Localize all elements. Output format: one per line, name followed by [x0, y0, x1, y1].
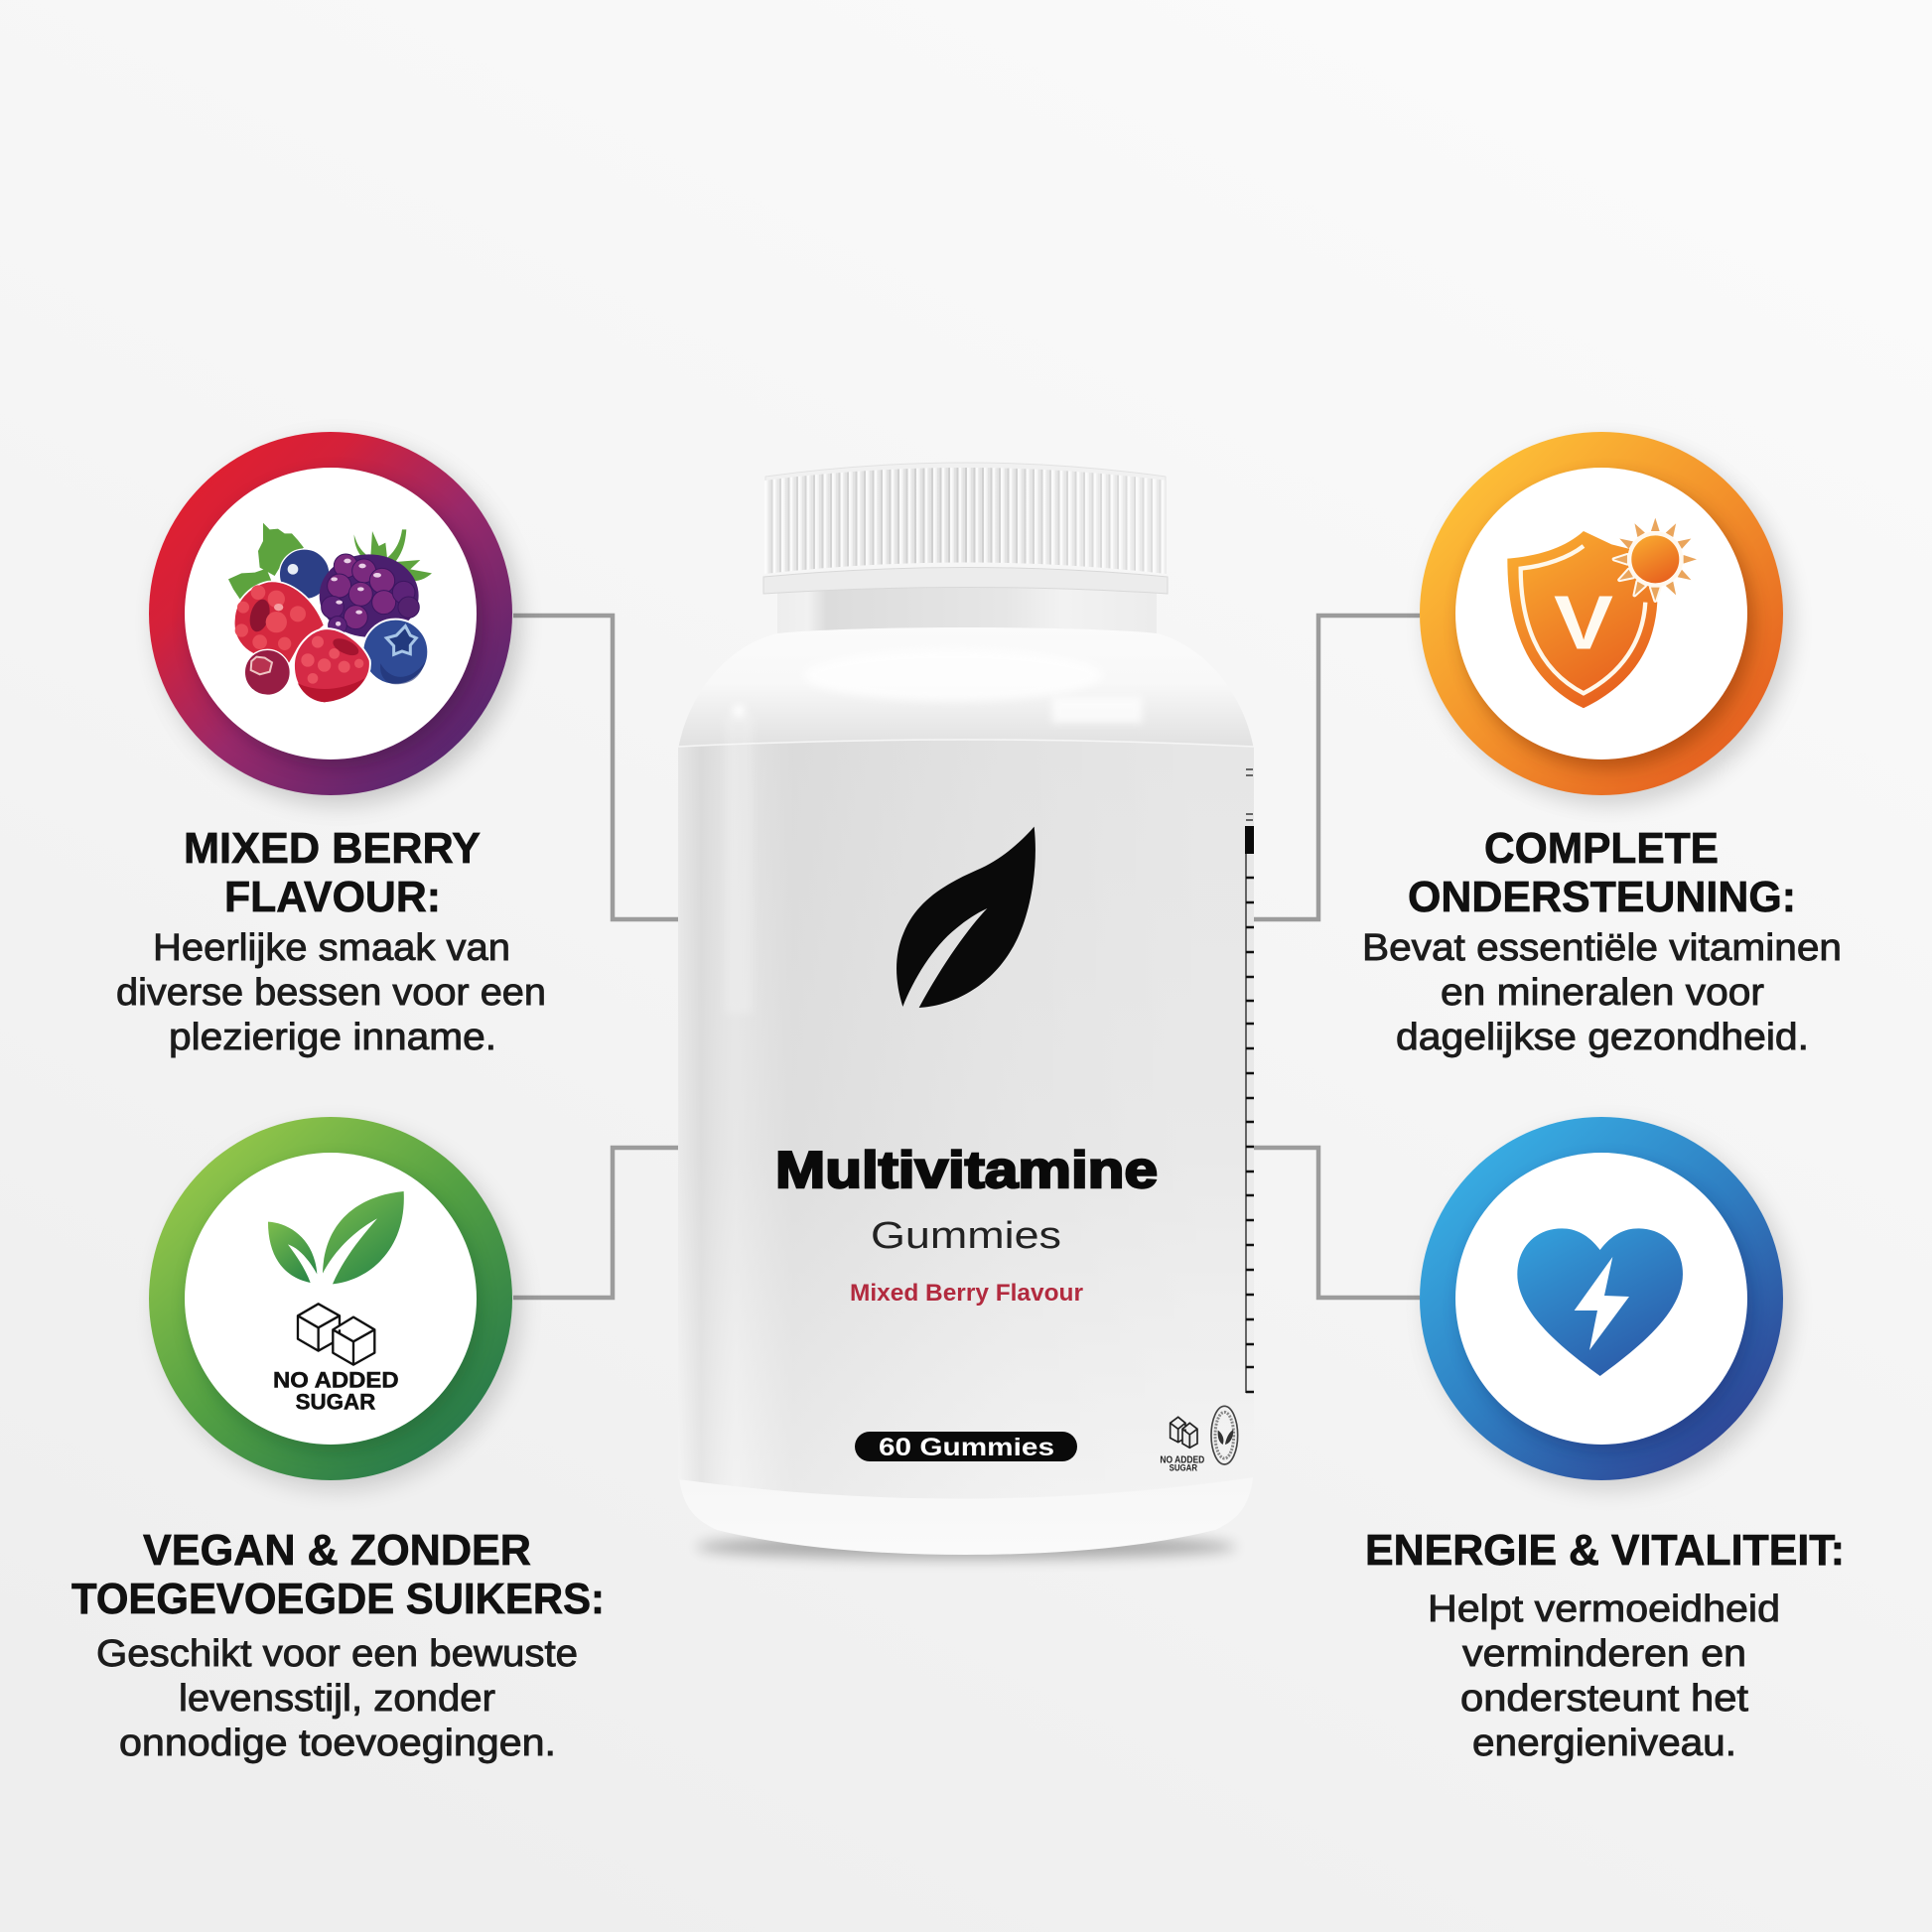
count pill: 60 Gummies: [879, 1434, 1054, 1461]
cap: [764, 463, 1167, 574]
cranberry: [244, 649, 290, 695]
product bottle: [678, 463, 1254, 1559]
heading: MIXED BERRY: [184, 824, 481, 873]
blackberry: [320, 554, 419, 637]
badge: vegan seal small: [1211, 1406, 1238, 1464]
body text: [96, 1633, 578, 1764]
raspberry large: [234, 581, 325, 663]
body text: [1362, 927, 1842, 1058]
label: [678, 740, 1254, 1499]
heading: ENERGIE & VITALITEIT:: [1365, 1526, 1845, 1575]
heading: TOEGEVOEGDE SUIKERS:: [71, 1575, 605, 1623]
body text: plezierige inname.: [169, 1017, 496, 1058]
logo: black leaf: [897, 827, 1035, 1008]
panel: energie and vitaliteit: [1365, 1117, 1845, 1764]
heading: [184, 824, 481, 921]
large blueberry: [362, 620, 428, 685]
leaves: [228, 523, 432, 599]
icon: berries: [228, 523, 432, 703]
connector: top right: [1253, 616, 1420, 919]
body text: onnodige toevoegingen.: [119, 1723, 556, 1764]
icon: leaves and sugar cubes: [268, 1191, 404, 1414]
reflections: [725, 697, 1142, 1013]
body text: diverse bessen voor een: [116, 972, 546, 1014]
icon ring: berries: [149, 432, 520, 804]
body text: Geschikt voor een bewuste: [96, 1633, 578, 1675]
panel: complete ondersteuning: [1362, 432, 1842, 1058]
icon ring: vegan: [149, 1117, 520, 1489]
shoulder highlight: [804, 649, 1102, 701]
body text: Heerlijke smaak van: [153, 927, 510, 969]
badge: no added sugar small: SUGAR: [1170, 1463, 1197, 1473]
heading: [71, 1526, 605, 1623]
body text: Bevat essentiële vitaminen: [1362, 927, 1842, 969]
connector: bottom right: [1253, 1148, 1420, 1298]
heading: COMPLETE: [1484, 824, 1719, 873]
body text: [1428, 1588, 1780, 1764]
body text: Helpt vermoeidheid: [1428, 1588, 1780, 1630]
icon: shield with sun: [1507, 518, 1697, 708]
body text: dagelijkse gezondheid.: [1396, 1017, 1809, 1058]
badge: no added sugar small: NO ADDED: [1160, 1454, 1204, 1465]
body text: verminderen en: [1462, 1633, 1746, 1675]
small blueberry: [279, 549, 330, 600]
sun: [1614, 518, 1697, 601]
icon ring: energy: [1420, 1117, 1791, 1489]
letter V: V: [1554, 580, 1613, 665]
flavour line: Mixed Berry Flavour: [850, 1280, 1083, 1307]
product name: Multivitamine: [775, 1142, 1158, 1199]
connector: top left: [513, 616, 679, 919]
side panel: nutrition table edge: [1245, 769, 1254, 1393]
floor shadow: [696, 1535, 1236, 1559]
badge: no added sugar small: [1160, 1417, 1204, 1473]
bottle body: [678, 627, 1254, 1555]
heading: VEGAN & ZONDER: [143, 1526, 531, 1575]
body text: en mineralen voor: [1441, 972, 1764, 1014]
heading: ONDERSTEUNING:: [1408, 873, 1796, 921]
icon ring: shield: [1420, 432, 1791, 804]
body text: energieniveau.: [1472, 1723, 1736, 1764]
connector: bottom left: [513, 1148, 679, 1298]
panel: mixed berry flavour: [116, 432, 546, 1058]
body text: ondersteunt het: [1460, 1678, 1748, 1720]
icon: leaves and sugar cubes: NO ADDED: [273, 1368, 399, 1393]
raspberry front: [294, 628, 370, 703]
heading: [1408, 824, 1796, 921]
panel: vegan and no added sugar: [71, 1117, 605, 1764]
body text: levensstijl, zonder: [179, 1678, 495, 1720]
icon: heart with bolt: [1517, 1228, 1683, 1376]
body text: [116, 927, 546, 1058]
product subtitle: Gummies: [871, 1215, 1061, 1257]
neck ring: [763, 568, 1168, 594]
bottle neck: [777, 588, 1157, 645]
heading: FLAVOUR:: [224, 873, 441, 921]
icon: leaves and sugar cubes: SUGAR: [296, 1389, 375, 1414]
count pill: [855, 1432, 1077, 1461]
